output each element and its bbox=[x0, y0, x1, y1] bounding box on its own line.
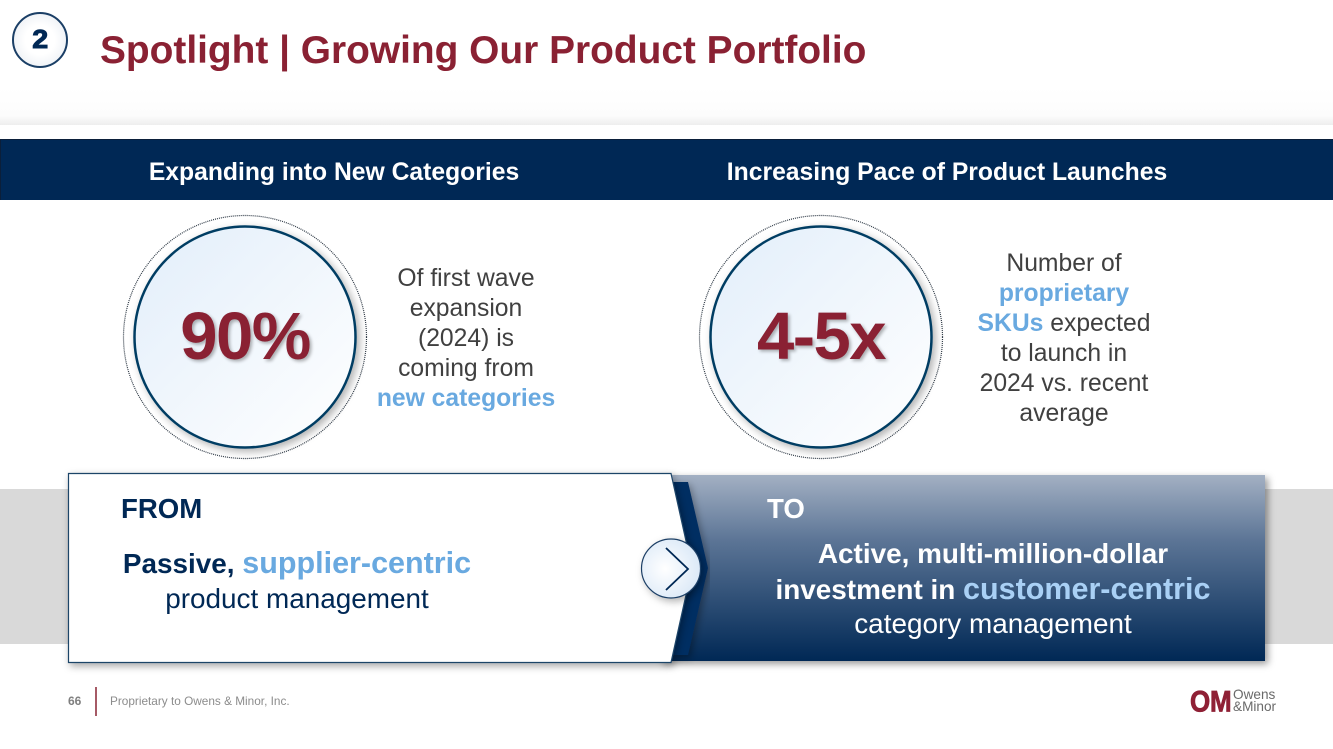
stat description: new categories: coming from bbox=[398, 355, 534, 382]
to text line 3: category management bbox=[854, 608, 1132, 639]
page number: 66 bbox=[68, 694, 81, 708]
logo bbox=[1190, 684, 1276, 718]
from label: FROM bbox=[121, 493, 202, 524]
logo wordmark: Owens bbox=[1233, 687, 1275, 702]
to text line 2: investment in customer-centric bbox=[775, 572, 1210, 606]
to label: TO bbox=[767, 493, 805, 524]
stat value: 4-5x: 4-5x bbox=[757, 299, 885, 374]
footer divider bbox=[95, 687, 97, 716]
to text line 1: Active, multi-million-dollar bbox=[818, 538, 1168, 569]
logo wordmark bbox=[1233, 687, 1276, 714]
stat description: product launches: Number of bbox=[1006, 250, 1122, 277]
section number badge bbox=[12, 12, 68, 68]
stat circle: 4-5x bbox=[698, 214, 944, 460]
stat description: product launches bbox=[978, 250, 1150, 427]
from text line 2: product management bbox=[165, 583, 429, 614]
stat description: product launches: to launch in bbox=[1001, 340, 1127, 367]
stat description: product launches: proprietary bbox=[999, 280, 1129, 307]
heading: product launches: Increasing Pace of Product Launches bbox=[727, 159, 1167, 186]
stat value: 90%: 90% bbox=[180, 299, 310, 374]
from text line 1: Passive, supplier-centric bbox=[123, 546, 471, 580]
grey background band bbox=[0, 489, 1333, 644]
stat description: new categories: expansion bbox=[410, 295, 522, 322]
section number badge: 2 bbox=[32, 24, 48, 54]
stat description: new categories: (2024) is bbox=[418, 325, 514, 352]
logo mark: OM bbox=[1190, 684, 1231, 718]
stat description: new categories bbox=[377, 265, 555, 412]
panel: to bbox=[660, 475, 1265, 661]
stat description: new categories: Of first wave bbox=[397, 265, 535, 292]
stat circle: 90% bbox=[122, 214, 368, 460]
stat description: product launches: average bbox=[1019, 400, 1109, 427]
header underline shadow bbox=[0, 88, 1333, 125]
stat description: product launches: SKUs expected bbox=[978, 310, 1150, 337]
footer note: Proprietary to Owens & Minor, Inc. bbox=[110, 694, 290, 708]
arrow button bbox=[640, 537, 706, 606]
title: Spotlight | Growing Our Product Portfolio bbox=[100, 29, 866, 72]
stat description: new categories: new categories bbox=[377, 385, 555, 412]
heading: new categories: Expanding into New Categories bbox=[149, 159, 519, 186]
chevron and from panel graphic bbox=[65, 471, 710, 671]
stat description: product launches: 2024 vs. recent bbox=[980, 370, 1148, 397]
header band bbox=[0, 139, 1333, 200]
logo wordmark: &Minor bbox=[1233, 698, 1276, 714]
